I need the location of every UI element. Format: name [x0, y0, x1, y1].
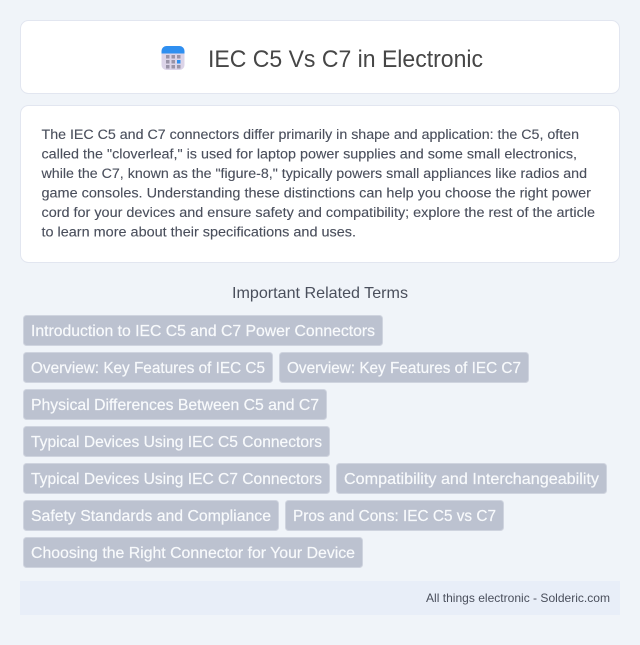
panel: intro paragraph: called the "cloverleaf," is used for laptop power supplies and some small electronics, — [42, 146, 577, 162]
chip: safety — [24, 500, 278, 530]
chip: choosing connector — [24, 538, 362, 568]
panel: intro paragraph: The IEC C5 and C7 connectors differ primarily in shape and application: the C5, often — [42, 127, 579, 143]
chip: overview C5 — [24, 352, 272, 382]
chip: overview C7: Overview: Key Features of IEC C7 — [287, 360, 521, 377]
panel: title header — [20, 20, 620, 94]
chip: pros and cons — [286, 500, 504, 530]
chip: pros and cons: Pros and Cons: IEC C5 vs C7 — [293, 508, 496, 525]
chip: physical differences: Physical Differences Between C5 and C7 — [31, 397, 319, 414]
chip: overview C7 — [280, 352, 528, 382]
chip: devices C5 — [24, 426, 330, 456]
chip: choosing connector: Choosing the Right Connector for Your Device — [31, 545, 355, 562]
chip: overview C5: Overview: Key Features of IEC C5 — [31, 360, 265, 377]
chip: compatibility: Compatibility and Interchangeability — [344, 471, 599, 488]
chip: devices C7 — [24, 464, 330, 494]
chip: physical differences — [24, 390, 326, 420]
chip: introduction — [24, 316, 382, 346]
icon: calendar — [162, 46, 184, 70]
panel: intro paragraph: game consoles. Understanding these distinctions can help you choose the right power — [42, 186, 591, 202]
chip: introduction: Introduction to IEC C5 and C7 Power Connectors — [31, 323, 375, 340]
chip: devices C7: Typical Devices Using IEC C7 Connectors — [31, 471, 322, 488]
panel: intro paragraph: cord for your devices and ensure safety and compatibility; explore the rest of the article — [42, 205, 595, 221]
panel: intro paragraph: while the C7, known as the "figure-8," typically powers small appliances like radios and — [40, 166, 587, 182]
footer: All things electronic - Solderic.com — [426, 591, 610, 605]
title: IEC C5 Vs C7 in Electronic — [208, 46, 483, 73]
panel: intro paragraph: to learn more about their specifications and uses. — [42, 224, 356, 240]
heading: related terms: Important Related Terms — [232, 285, 408, 302]
footer — [20, 581, 620, 615]
chip: compatibility — [336, 464, 606, 494]
chip: safety: Safety Standards and Compliance — [31, 508, 271, 525]
panel: intro paragraph — [20, 106, 620, 262]
chip: devices C5: Typical Devices Using IEC C5 Connectors — [31, 434, 322, 451]
